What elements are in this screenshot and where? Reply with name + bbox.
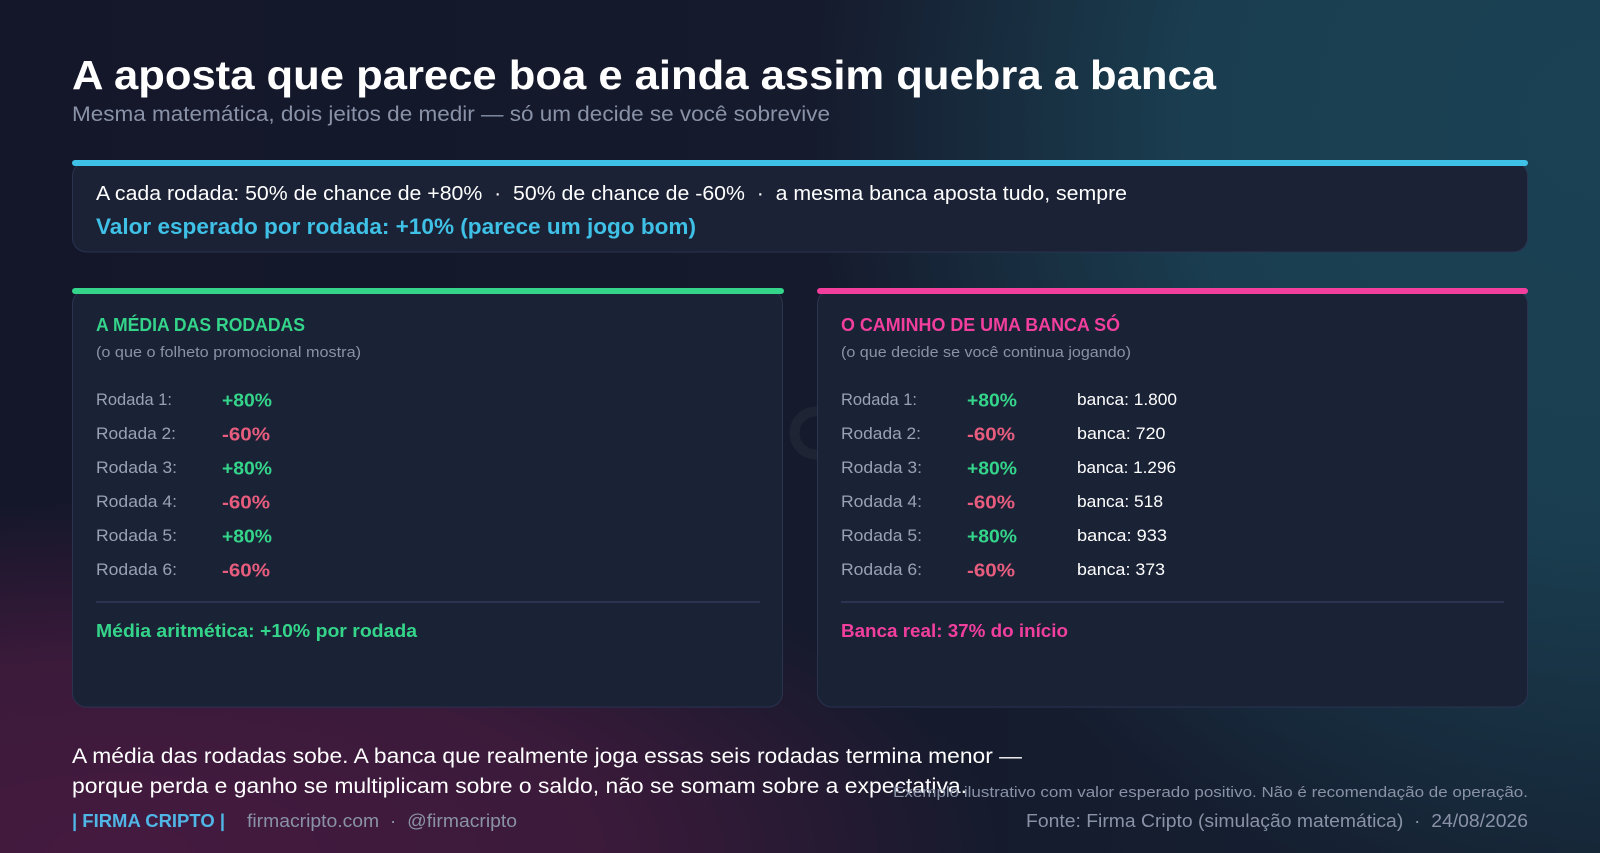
right rounds list: banca: 1.296 [1077,458,1176,477]
left accent bar [72,288,784,294]
conclusion text: porque perda e ganho se multiplicam sobre o saldo, não se somam sobre a expectativa. [72,775,967,798]
subtitle: Mesma matemática, dois jeitos de medir — só um decide se você sobrevive [72,103,830,126]
source and date: Fonte: Firma Cripto (simulação matemática) · 24/08/2026 [1026,811,1528,831]
premise text: A cada rodada: 50% de chance de +80% · 50% de chance de -60% · a mesma banca aposta tudo, sempre [96,183,1127,205]
right rounds list: +80% [967,526,1017,546]
panel: a média das rodadas [72,288,784,707]
right rounds list: banca: 1.800 [1077,390,1177,409]
left rounds list: +80% [222,526,272,546]
right rounds list: Rodada 4: [841,492,922,511]
panel: o caminho de uma banca só [817,288,1528,707]
right rounds list [841,390,1177,580]
left subheading: (o que o folheto promocional mostra) [96,344,361,361]
right rounds list: banca: 720 [1077,424,1166,443]
right rounds list: banca: 373 [1077,560,1165,579]
left rounds list: Rodada 2: [96,424,176,443]
expected value: Valor esperado por rodada: +10% (parece um jogo bom) [96,214,696,239]
conclusion text [72,745,1022,798]
left rounds list: -60% [222,560,270,580]
premise accent bar [72,160,1528,166]
left heading: A MÉDIA DAS RODADAS [96,314,305,335]
title: A aposta que parece boa e ainda assim quebra a banca [72,52,1217,98]
left result: Média aritmética: +10% por rodada [96,621,418,641]
brand footer: firmacripto.com · @firmacripto [247,811,517,831]
left rounds list: -60% [222,424,270,444]
right rounds list: Rodada 6: [841,560,922,579]
right rounds list: -60% [967,492,1015,512]
disclaimer: Exemplo ilustrativo com valor esperado positivo. Não é recomendação de operação. [893,784,1528,801]
right rounds list: banca: 933 [1077,526,1167,545]
panel: premise [72,160,1528,252]
right rounds list: Rodada 5: [841,526,922,545]
watermark ring [794,412,838,454]
right accent bar [817,288,1528,294]
right rounds list: Rodada 1: [841,390,917,409]
right rounds list: -60% [967,424,1015,444]
left rounds list [96,390,272,580]
right rounds list: +80% [967,390,1017,410]
left rounds list: Rodada 1: [96,390,172,409]
right subheading: (o que decide se você continua jogando) [841,344,1131,361]
right result: Banca real: 37% do início [841,621,1068,641]
right heading: O CAMINHO DE UMA BANCA SÓ [841,314,1120,335]
left rounds list: Rodada 4: [96,492,177,511]
left rounds list: Rodada 3: [96,458,177,477]
brand footer: | FIRMA CRIPTO | [72,811,225,831]
right rounds list: banca: 518 [1077,492,1163,511]
right rounds list: -60% [967,560,1015,580]
conclusion text: A média das rodadas sobe. A banca que realmente joga essas seis rodadas termina menor — [72,745,1022,768]
right rounds list: Rodada 2: [841,424,921,443]
right rounds list: +80% [967,458,1017,478]
left rounds list: +80% [222,458,272,478]
right rounds list: Rodada 3: [841,458,922,477]
brand footer [72,811,517,831]
left rounds list: -60% [222,492,270,512]
left rounds list: Rodada 6: [96,560,177,579]
left rounds list: +80% [222,390,272,410]
left rounds list: Rodada 5: [96,526,177,545]
